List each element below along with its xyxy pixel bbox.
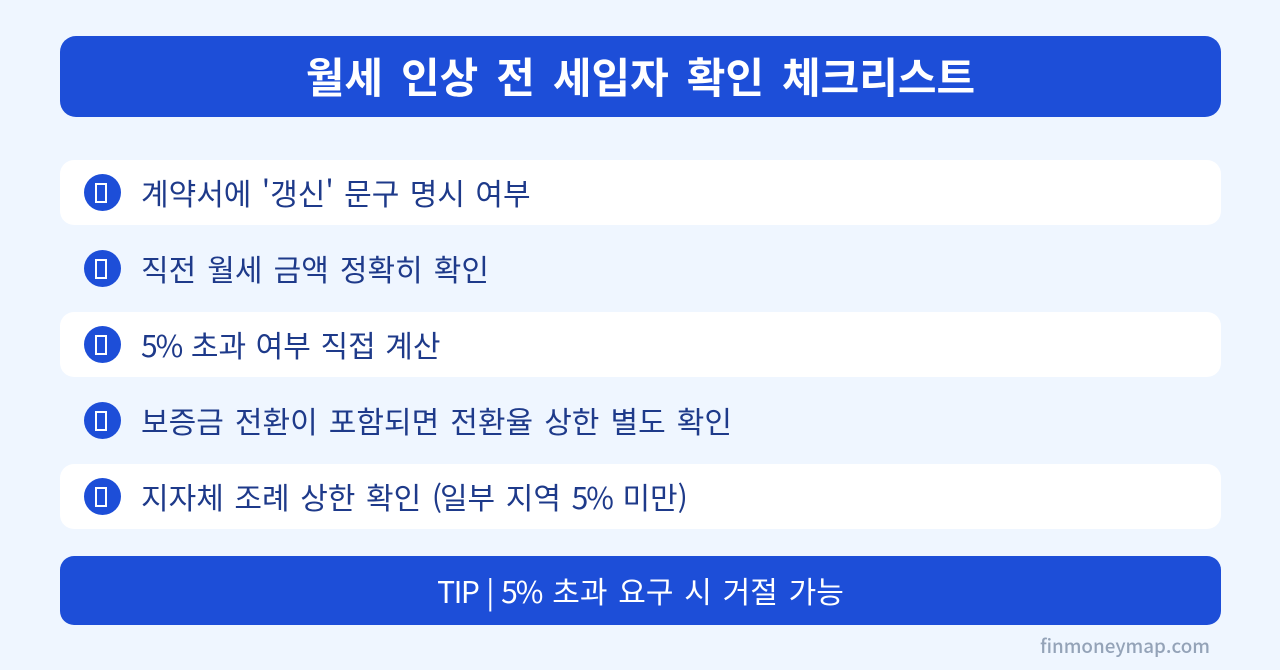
item 2 text: 직전 월세 금액 정확히 확인 (141, 246, 489, 290)
checklist item 3 (60, 312, 1221, 377)
title banner: 월세 인상 전 세입자 확인 체크리스트 (306, 45, 975, 106)
icon: check badge 5 (84, 478, 121, 515)
icon: check badge 3 (84, 326, 121, 363)
checklist item 1 (60, 160, 1221, 225)
footer brand: finmoneymap.com (1040, 632, 1210, 659)
checklist item 4 (84, 398, 732, 442)
checklist item 2 (84, 246, 489, 290)
item 1 text: 계약서에 '갱신' 문구 명시 여부 (141, 170, 531, 214)
icon: check badge 4 (84, 402, 121, 439)
checklist item 5 (60, 464, 1221, 529)
tip banner (60, 556, 1221, 625)
icon: check badge 2 (84, 250, 121, 287)
title banner (60, 36, 1221, 117)
item 5 text: 지자체 조례 상한 확인 (일부 지역 5% 미만) (141, 474, 688, 518)
item 3 text: 5% 초과 여부 직접 계산 (141, 322, 440, 366)
icon: check badge 1 (84, 174, 121, 211)
tip banner: TIP | 5% 초과 요구 시 거절 가능 (437, 568, 844, 612)
item 4 text: 보증금 전환이 포함되면 전환율 상한 별도 확인 (141, 398, 732, 442)
